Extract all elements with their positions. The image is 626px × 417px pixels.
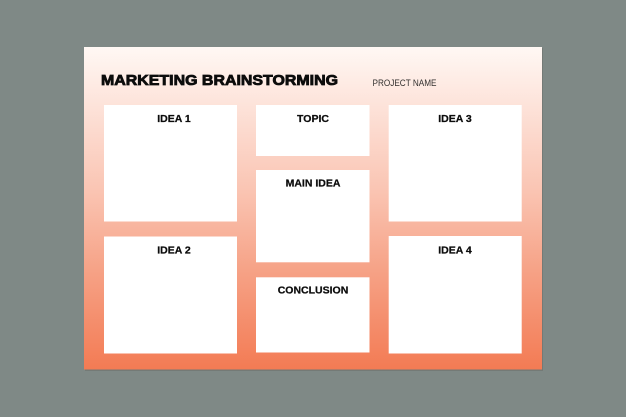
panel: idea 3: IDEA 3 xyxy=(438,113,472,125)
panel: main idea: MAIN IDEA xyxy=(286,178,341,190)
panel: topic: TOPIC xyxy=(297,113,329,125)
card shadow xyxy=(85,48,543,371)
panel: idea 1 xyxy=(104,105,237,222)
panel: idea 3 xyxy=(389,105,522,222)
panel: topic xyxy=(256,105,370,156)
panel: idea 1: IDEA 1 xyxy=(157,113,191,125)
panel: conclusion xyxy=(256,277,370,352)
panel: idea 2: IDEA 2 xyxy=(157,244,191,256)
panel: brainstorming board xyxy=(84,47,542,370)
project name label: PROJECT NAME xyxy=(372,78,436,88)
panel: idea 4 xyxy=(389,236,522,354)
panel: main idea xyxy=(256,170,370,262)
panel: conclusion: CONCLUSION xyxy=(278,284,348,296)
panel: idea 2 xyxy=(104,236,237,354)
panel: idea 4: IDEA 4 xyxy=(438,244,472,256)
title: MARKETING BRAINSTORMING xyxy=(101,73,338,89)
